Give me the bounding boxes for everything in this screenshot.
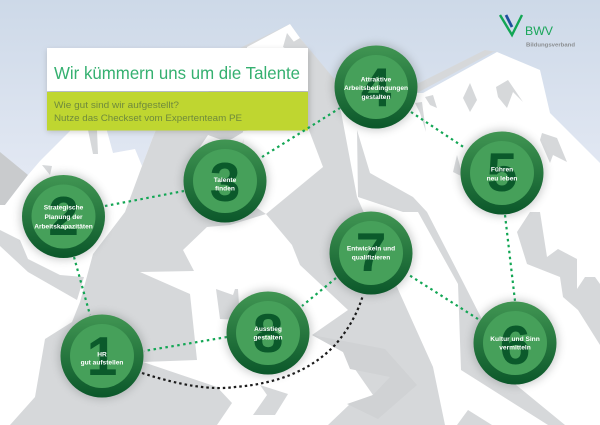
- station 3: [181, 137, 269, 225]
- black dotted path: [142, 295, 363, 388]
- station 8: gestalten: [254, 335, 282, 342]
- station 7: Entwickeln und: [347, 245, 395, 252]
- title panel: Nutze das Checkset vom Expertenteam PE: [54, 113, 242, 124]
- station 5: 5: [487, 141, 517, 203]
- station 1: [58, 312, 146, 400]
- sky background: [0, 0, 600, 220]
- station 6: vermitteln: [499, 345, 531, 352]
- station 4: Attraktive: [361, 77, 392, 84]
- station 5: Führen: [491, 166, 513, 173]
- station 7: 7: [356, 221, 386, 283]
- station 5: [458, 129, 546, 217]
- station 5: neu leben: [487, 175, 517, 182]
- title panel: [47, 48, 310, 132]
- station 2: 2: [48, 185, 79, 247]
- station 4: Arbeitsbedingungen: [344, 85, 408, 92]
- station 7: [327, 209, 415, 297]
- station 1: HR: [97, 351, 107, 358]
- station 2: Strategische: [44, 204, 84, 212]
- station 1: 1: [87, 325, 117, 387]
- station 3: Talente: [214, 177, 237, 184]
- station 4: [332, 43, 420, 131]
- station 3: 3: [210, 151, 240, 213]
- logo: [500, 15, 575, 48]
- station 2: Arbeitskapazitäten: [34, 224, 93, 230]
- title: Wir kümmern uns um die Talente: [54, 63, 300, 83]
- station 8: Ausstieg: [254, 326, 282, 333]
- logo: BWV: [525, 24, 553, 38]
- station 6: [471, 299, 559, 387]
- station 8: 8: [253, 302, 283, 364]
- station 2: Planung der: [44, 214, 83, 221]
- station 6: 6: [500, 314, 530, 376]
- station 6: Kultur und Sinn: [490, 336, 540, 343]
- station 2: [20, 172, 108, 260]
- station 4: 4: [361, 56, 392, 118]
- station 1: gut aufstellen: [81, 360, 123, 366]
- station 3: finden: [215, 186, 235, 193]
- station 7: qualifizieren: [352, 254, 390, 261]
- green dotted connectors: [74, 108, 515, 351]
- station 4: gestalten: [362, 94, 390, 101]
- subtitle: Wie gut sind wir aufgestellt?: [54, 100, 179, 111]
- logo: Bildungsverband: [526, 42, 575, 48]
- station 8: [224, 289, 312, 377]
